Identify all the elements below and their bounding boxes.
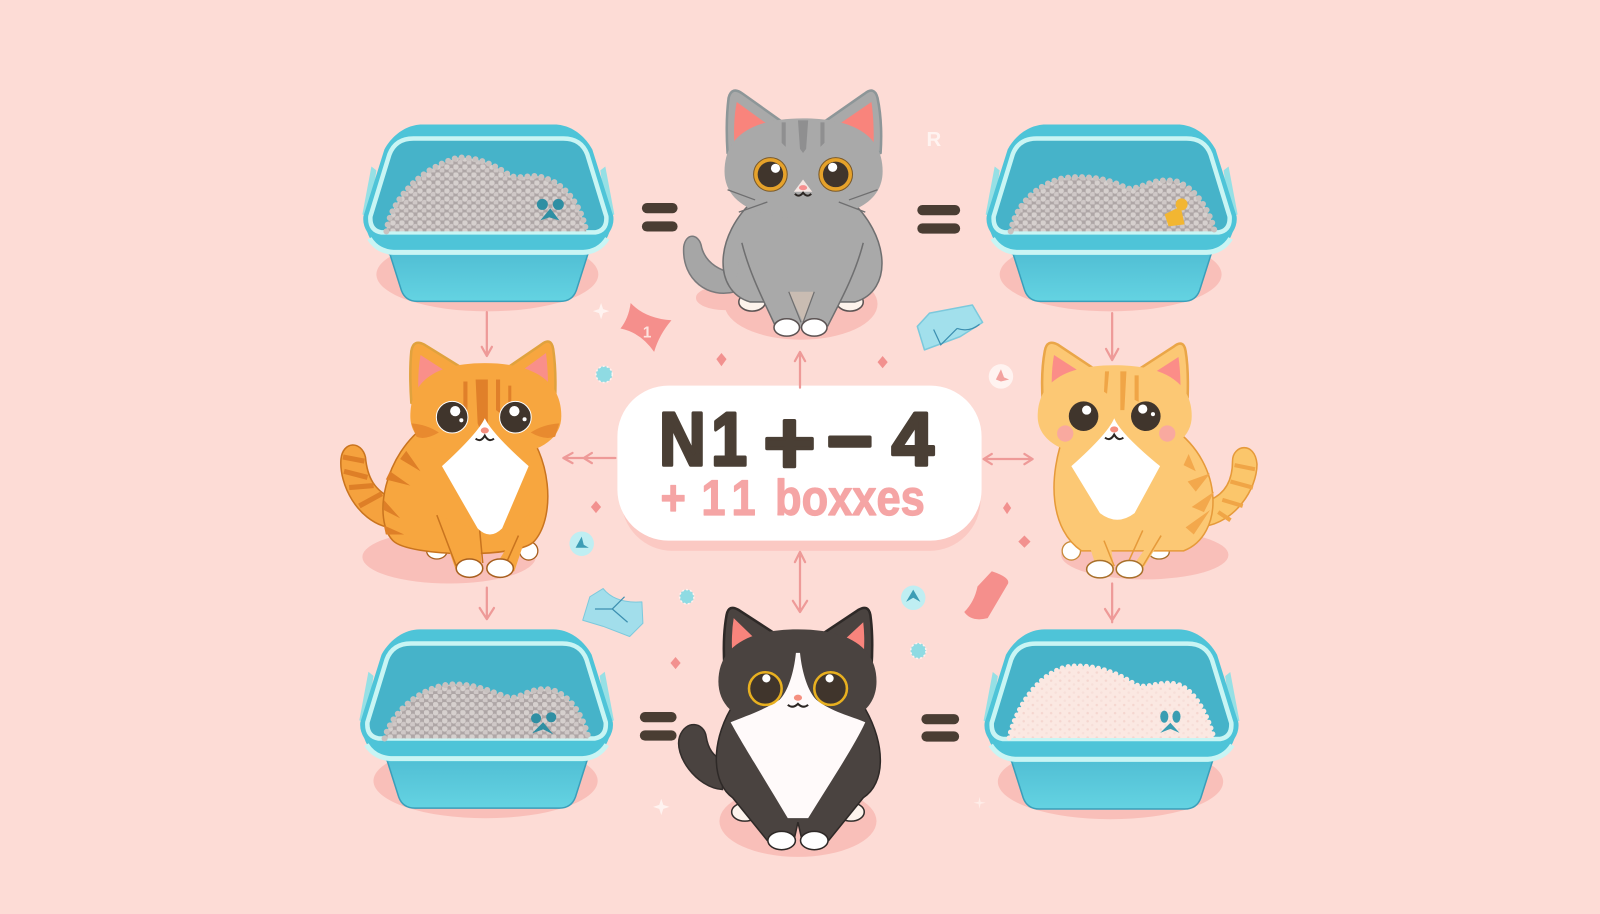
decoration: blue snowflakes [596, 366, 926, 658]
ears [727, 91, 786, 153]
head [1038, 365, 1192, 457]
decoration: pink diamonds [591, 353, 1031, 669]
shadow [725, 268, 878, 340]
nose and mouth [1110, 426, 1118, 433]
litter: grey pile [386, 157, 586, 231]
decoration: pink tag top [620, 303, 671, 352]
front paws [774, 319, 799, 336]
nose and mouth [794, 180, 812, 192]
back paws [739, 293, 765, 311]
front legs [1082, 520, 1163, 569]
shadow [719, 785, 877, 857]
front paws [768, 831, 795, 850]
decoration: blue cloth top right [917, 305, 983, 350]
front legs [437, 510, 531, 571]
body stripes [1184, 454, 1214, 535]
ears [1042, 343, 1098, 403]
eyes [1069, 401, 1098, 431]
head [725, 118, 883, 218]
boxes subheading: + [661, 470, 686, 526]
decoration: pink tag bottom right [964, 571, 1008, 619]
formula heading: − [827, 396, 873, 485]
body stripes [384, 451, 421, 535]
body [1054, 428, 1213, 551]
boxes subheading: 1 [701, 470, 726, 526]
bib [442, 418, 529, 535]
arrow: center left [563, 453, 615, 463]
front paws [1087, 561, 1113, 578]
arrow: center down [793, 552, 807, 612]
eyes [436, 401, 468, 433]
icon: teal clover mark [1160, 711, 1181, 733]
litter box: top left [362, 124, 614, 311]
panel shadow [621, 392, 981, 551]
tail [1204, 448, 1257, 526]
litter: white pile [1009, 666, 1214, 738]
shadow [362, 530, 536, 583]
litter box: bottom left [359, 629, 614, 818]
arrow: top-right box to yellow cat [1106, 313, 1118, 360]
head stripes [463, 379, 511, 434]
decoration: white sparkles [593, 303, 986, 815]
whiskers [728, 190, 878, 212]
head stripes [1104, 371, 1139, 410]
body and legs [716, 709, 880, 841]
equals signs [640, 203, 960, 742]
body [383, 423, 548, 554]
head [410, 363, 561, 457]
back paws [1062, 542, 1081, 560]
eyes [749, 672, 782, 705]
belly gap [789, 292, 814, 322]
icon: teal clover mark [537, 199, 564, 220]
boxes subheading: 1 [732, 470, 756, 526]
formula heading: + [763, 393, 816, 493]
cat: grey [684, 91, 883, 340]
arrow: top-left box to orange cat [482, 312, 492, 356]
body [723, 199, 882, 302]
tail [684, 236, 735, 293]
arrow: center right [984, 454, 1033, 464]
front legs [735, 243, 863, 328]
back paws [427, 543, 447, 559]
shadow [1061, 530, 1228, 579]
front paws [456, 559, 483, 577]
cat: black and white [679, 608, 880, 857]
arrow: center up [795, 352, 805, 388]
icon: teal clover mark [531, 712, 556, 734]
litter box: top right [986, 124, 1238, 311]
decoration: pink-white badge [989, 364, 1013, 389]
formula heading [659, 393, 934, 493]
head [718, 629, 877, 728]
arrow: orange cat to bottom-left box [480, 588, 494, 619]
litter box: bottom right [984, 629, 1239, 819]
decoration: blue badges [569, 531, 925, 610]
arrow: yellow cat to bottom-right box [1105, 583, 1119, 622]
ears [724, 608, 786, 668]
tail [679, 725, 722, 790]
ears [410, 343, 467, 403]
tag number: 1 [643, 325, 652, 342]
cat: yellow tabby [1038, 343, 1257, 579]
panel [617, 386, 982, 541]
cat: orange tabby [341, 342, 561, 583]
formula heading: N [659, 397, 706, 481]
eyes [754, 158, 787, 191]
stripes [782, 120, 824, 153]
bib [1071, 418, 1160, 520]
decoration: faint letter: R [926, 129, 941, 151]
nose and mouth [794, 695, 802, 701]
nose and mouth [481, 427, 489, 434]
icon: yellow mark [1165, 198, 1188, 226]
tail [341, 445, 390, 527]
formula heading: 1 [711, 397, 747, 481]
litter: grey pile [385, 684, 589, 738]
formula heading: 4 [892, 397, 934, 481]
back paws [732, 803, 758, 821]
boxes subheading: boxxes [775, 470, 925, 526]
white blaze and belly [731, 653, 865, 818]
arrows [480, 312, 1119, 622]
litter: grey low pile [1011, 177, 1215, 231]
center label panel [617, 386, 982, 551]
blush [1057, 425, 1073, 442]
decoration: blue cloth bottom left [583, 589, 643, 637]
